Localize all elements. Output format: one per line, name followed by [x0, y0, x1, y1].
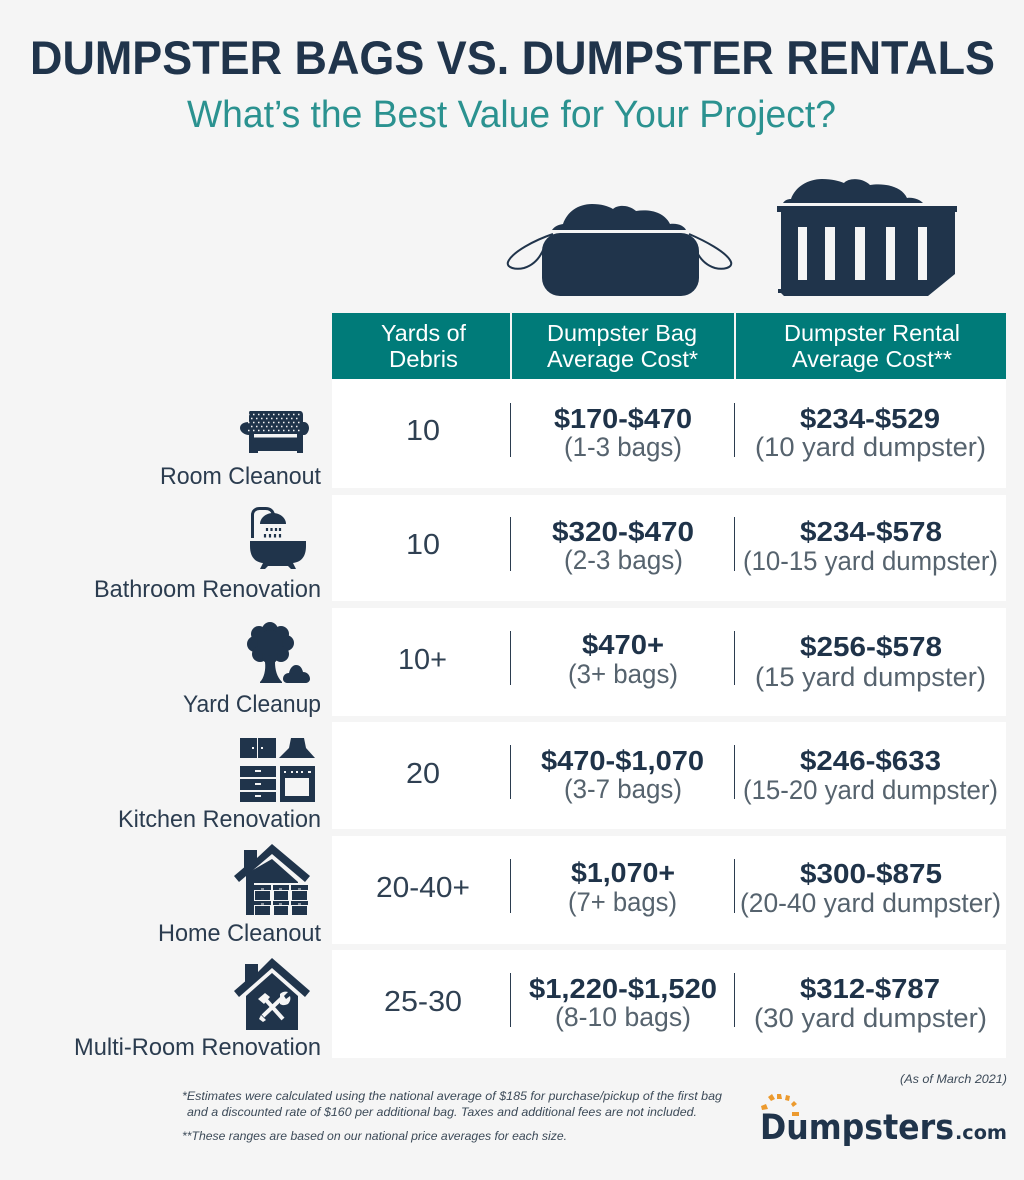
- row: multi-room renovation: (30 yard dumpster): [754, 1003, 987, 1033]
- icon: sofa: [240, 411, 309, 453]
- row: bathroom renovation: [94, 495, 1006, 603]
- row: bathroom renovation: (10-15 yard dumpster): [743, 546, 998, 576]
- row: multi-room renovation: $1,220-$1,520: [529, 973, 717, 1004]
- logo: Dumpsters.com: .com: [955, 1122, 1007, 1144]
- icon: bathtub with shower: [250, 508, 306, 569]
- header: yards of debris: Yards of: [381, 320, 467, 346]
- row: multi-room renovation: 25-30: [384, 986, 462, 1018]
- row: kitchen renovation: $246-$633: [800, 745, 941, 776]
- header: dumpster bag average cost: Average Cost*: [547, 346, 698, 372]
- row: room cleanout: $234-$529: [800, 403, 940, 434]
- icon: tree and bush: [247, 622, 310, 683]
- row: yard cleanup: 10+: [398, 644, 447, 676]
- icon: kitchen: [240, 738, 315, 802]
- row: bathroom renovation: (2-3 bags): [564, 545, 683, 575]
- row: kitchen renovation: (3-7 bags): [564, 774, 682, 804]
- row: kitchen renovation: [118, 722, 1006, 833]
- subtitle: What’s the Best Value for Your Project?: [187, 94, 836, 136]
- row: yard cleanup: (3+ bags): [568, 659, 678, 689]
- row: bathroom renovation: $320-$470: [552, 516, 694, 547]
- header: dumpster bag average cost: Dumpster Bag: [547, 320, 697, 346]
- icon: dumpster: [777, 179, 957, 296]
- row: room cleanout: [160, 379, 1006, 490]
- row: kitchen renovation: Kitchen Renovation: [118, 806, 321, 833]
- footnotes: *Estimates were calculated using the national average of $185 for purchase/pickup of the first bag: [182, 1089, 722, 1103]
- row: room cleanout: (1-3 bags): [564, 432, 682, 462]
- row: room cleanout: 10: [406, 415, 440, 447]
- row: yard cleanup: [183, 608, 1006, 718]
- row: multi-room renovation: (8-10 bags): [555, 1002, 691, 1032]
- row: yard cleanup: (15 yard dumpster): [755, 662, 986, 692]
- row: yard cleanup: Yard Cleanup: [183, 691, 321, 718]
- header: dumpster rental average cost: Dumpster Rental: [784, 320, 960, 346]
- row: home cleanout: $300-$875: [800, 858, 942, 889]
- footnotes: [182, 1089, 722, 1143]
- row: bathroom renovation: Bathroom Renovation: [94, 576, 321, 603]
- row: bathroom renovation: 10: [406, 529, 440, 561]
- row: kitchen renovation: (15-20 yard dumpster): [743, 775, 998, 805]
- row: kitchen renovation: $470-$1,070: [541, 745, 704, 776]
- header: yards of debris: [332, 313, 510, 379]
- logo: Dumpsters.com: Dumpsters: [760, 1108, 954, 1148]
- row: multi-room renovation: $312-$787: [800, 973, 940, 1004]
- row: room cleanout: $170-$470: [554, 403, 692, 434]
- header: dumpster rental average cost: Average Cost**: [792, 346, 952, 372]
- header: yards of debris: Debris: [389, 346, 458, 372]
- row: home cleanout: Home Cleanout: [158, 920, 321, 947]
- icon: house with boxes: [234, 844, 310, 915]
- row: yard cleanup: $470+: [582, 629, 664, 660]
- date note: (As of March 2021): [900, 1072, 1007, 1086]
- row: multi-room renovation: Multi-Room Renovation: [74, 1034, 321, 1061]
- footnotes: and a discounted rate of $160 per additional bag. Taxes and additional fees are not included.: [187, 1105, 697, 1119]
- icon: house with tools: [234, 958, 310, 1030]
- row: room cleanout: Room Cleanout: [160, 463, 321, 490]
- row: room cleanout: (10 yard dumpster): [755, 432, 986, 462]
- icon: dumpster bag: [508, 204, 731, 296]
- row: yard cleanup: $256-$578: [800, 631, 942, 662]
- footnotes: **These ranges are based on our national price averages for each size.: [182, 1129, 567, 1143]
- row: home cleanout: 20-40+: [376, 872, 470, 904]
- row: home cleanout: $1,070+: [571, 857, 675, 888]
- row: bathroom renovation: $234-$578: [800, 516, 942, 547]
- header: dumpster rental average cost: [736, 313, 1006, 379]
- row: multi-room renovation: [74, 950, 1006, 1061]
- row: home cleanout: (20-40 yard dumpster): [740, 888, 1001, 918]
- row: home cleanout: [158, 836, 1006, 947]
- logo: Dumpsters.com: [760, 1094, 1007, 1148]
- header: dumpster bag average cost: [512, 313, 734, 379]
- table header: [332, 313, 1006, 379]
- row: kitchen renovation: 20: [406, 758, 440, 790]
- title: DUMPSTER BAGS VS. DUMPSTER RENTALS: [30, 31, 995, 84]
- row: home cleanout: (7+ bags): [568, 887, 677, 917]
